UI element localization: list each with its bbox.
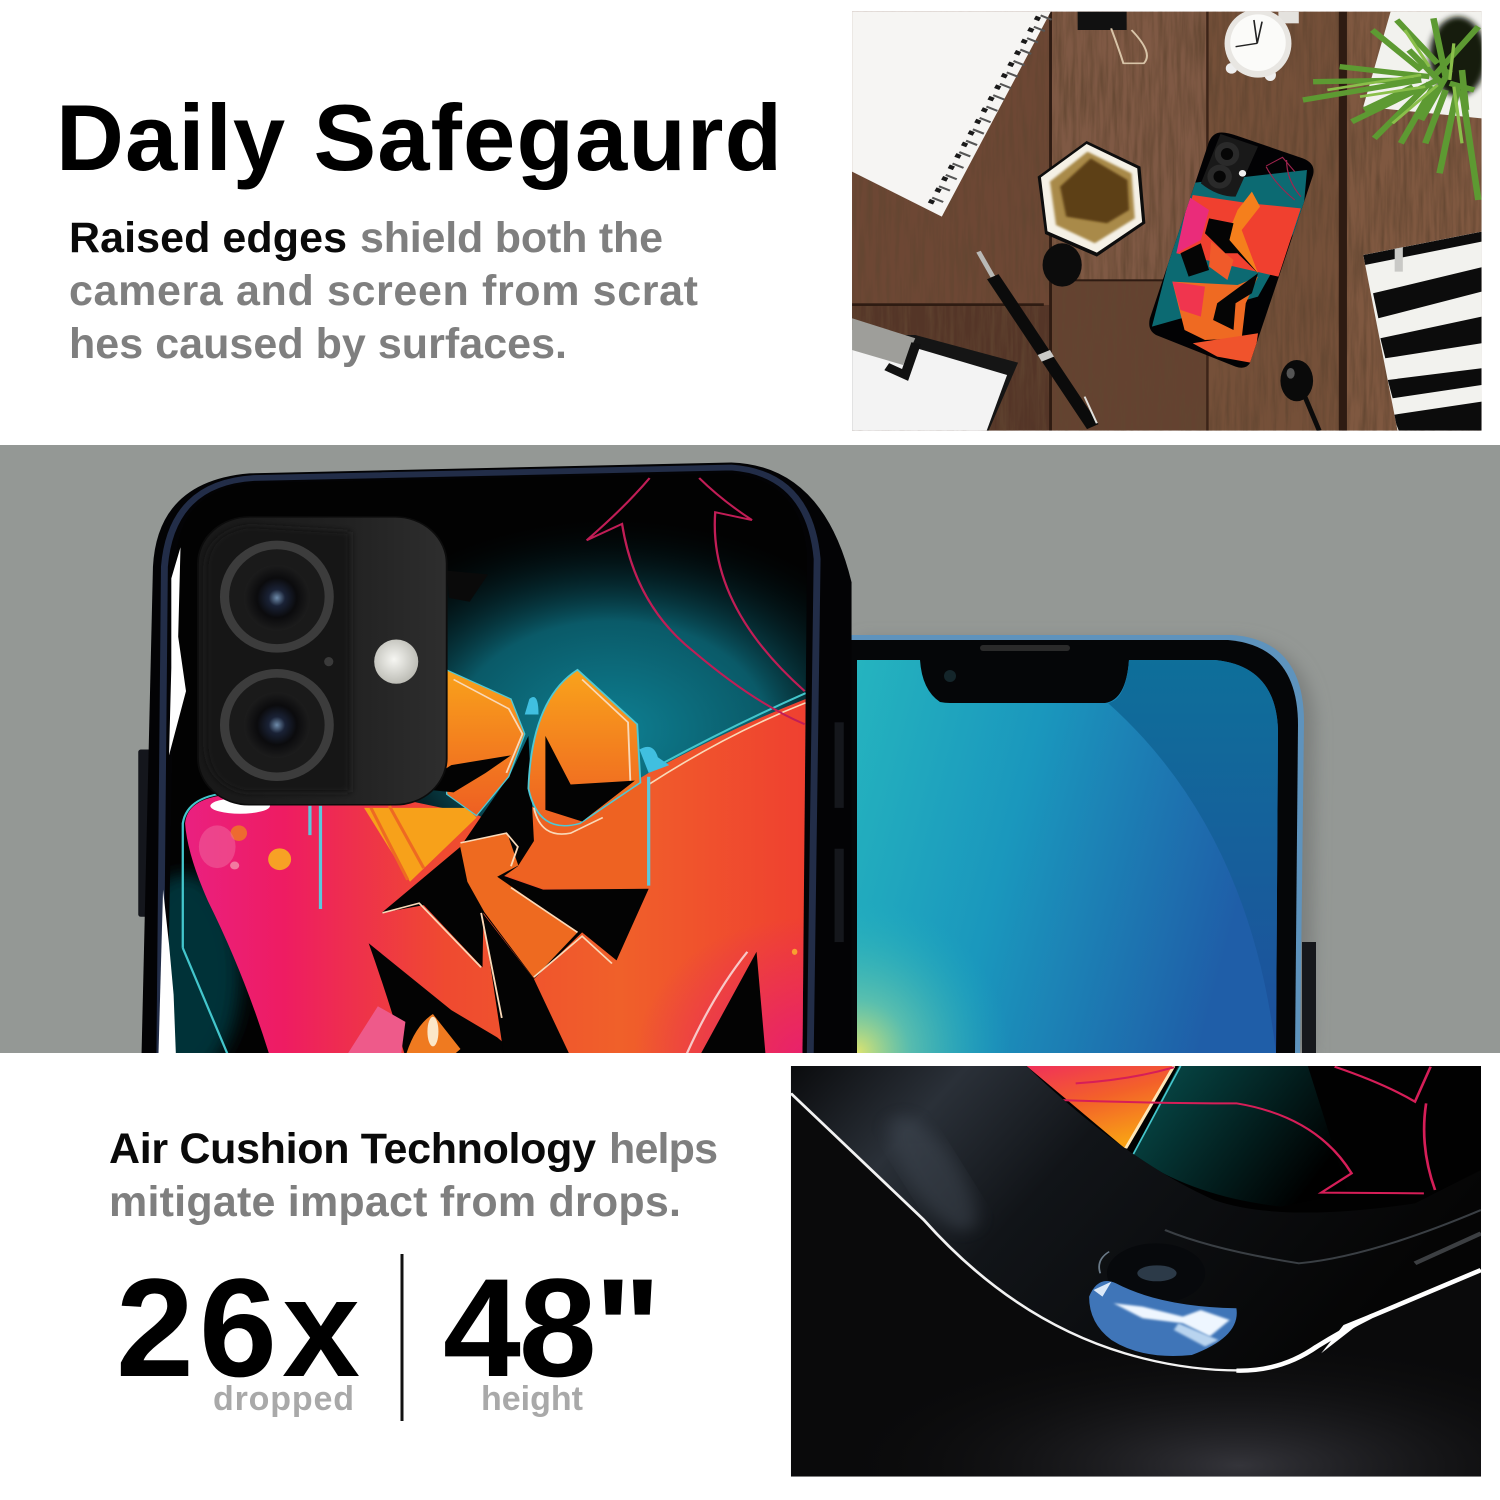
orange mid region bbox=[502, 781, 649, 889]
graffiti body bbox=[185, 699, 806, 1057]
blue splashes bbox=[639, 747, 669, 773]
microphone dot bbox=[324, 657, 333, 666]
alarm clock bbox=[1225, 9, 1299, 81]
pen bbox=[979, 252, 1097, 427]
orange left shape bbox=[442, 668, 525, 816]
divider bbox=[400, 1254, 404, 1421]
cream outlines bbox=[382, 680, 806, 1018]
side button bbox=[1302, 942, 1316, 1053]
lower lens bbox=[220, 669, 334, 781]
description text: Raised edges bbox=[69, 214, 347, 262]
wooden planks bbox=[852, 12, 1482, 431]
left side buttons bbox=[138, 750, 149, 917]
gray product panel bbox=[0, 445, 1500, 1053]
mini phone case bbox=[1149, 132, 1314, 368]
description text: hes caused by surfaces. bbox=[69, 320, 567, 368]
title: Daily Safegaurd bbox=[56, 85, 782, 190]
dark splash bbox=[447, 571, 488, 602]
right side buttons bbox=[835, 722, 844, 942]
small orange shape bbox=[406, 1014, 460, 1053]
air cushion text: Air Cushion Technology bbox=[109, 1125, 596, 1173]
description text: camera and screen from scrat bbox=[69, 267, 698, 315]
coffee cup bbox=[1038, 141, 1145, 287]
paint dots bbox=[199, 825, 797, 955]
potted plant bbox=[1303, 12, 1486, 200]
orange top shape bbox=[528, 670, 640, 826]
dark drop bbox=[1107, 1243, 1205, 1303]
binder clip bbox=[1078, 12, 1147, 63]
blue frame bbox=[850, 635, 1304, 1053]
shadow bbox=[1267, 644, 1318, 1053]
navy frame bbox=[160, 468, 817, 1057]
yellow stripes bbox=[364, 808, 477, 882]
artwork window bbox=[1027, 1066, 1482, 1226]
bezel bbox=[850, 640, 1298, 1053]
front phone with screen bbox=[850, 635, 1316, 1053]
flash bbox=[374, 639, 418, 684]
close-up photo: air cushion corner bbox=[791, 1066, 1482, 1477]
white edge line bbox=[791, 1093, 1481, 1371]
case artwork bbox=[168, 478, 806, 1053]
description text: shield both the bbox=[360, 214, 663, 262]
notebook bbox=[852, 12, 1051, 217]
pink arrow lines bbox=[1058, 1067, 1435, 1193]
striped notebook bbox=[1360, 230, 1482, 433]
air cushion text: helps bbox=[609, 1125, 718, 1173]
air cushion text: mitigate impact from drops. bbox=[109, 1178, 681, 1226]
inner bumper lip bbox=[1165, 1210, 1481, 1263]
paint drips bbox=[310, 777, 649, 909]
stat: 48 inches height: height bbox=[481, 1380, 583, 1418]
stat: 26x dropped: 26x bbox=[116, 1249, 360, 1406]
clipboard bbox=[852, 318, 1018, 431]
screen bbox=[857, 660, 1278, 1053]
air cushion text bbox=[109, 1125, 718, 1226]
teal outlines bbox=[183, 693, 806, 1057]
white highlights bbox=[427, 1017, 438, 1046]
blue water droplet bbox=[1089, 1281, 1237, 1356]
upper lens bbox=[220, 541, 334, 653]
stat: 26x dropped: dropped bbox=[213, 1380, 354, 1418]
pink corner bbox=[656, 935, 804, 1053]
pink patch bbox=[348, 1006, 406, 1053]
case outer bbox=[141, 462, 852, 1057]
main phone back with case bbox=[138, 462, 852, 1053]
description text bbox=[69, 214, 698, 368]
orange center piece bbox=[460, 833, 578, 978]
case bumper band bbox=[791, 1066, 1481, 1370]
white reflection strips bbox=[158, 547, 186, 1055]
black graffiti shapes bbox=[545, 736, 635, 821]
camera module bbox=[198, 517, 447, 805]
front camera and speaker bbox=[944, 645, 1070, 682]
pink arrows bbox=[587, 478, 805, 724]
black diagonal and wedges bbox=[382, 736, 649, 979]
stat: 48 inches height: 48" bbox=[443, 1249, 661, 1406]
earbud bbox=[1280, 360, 1319, 431]
photo: phone case on wooden desk bbox=[852, 9, 1486, 433]
